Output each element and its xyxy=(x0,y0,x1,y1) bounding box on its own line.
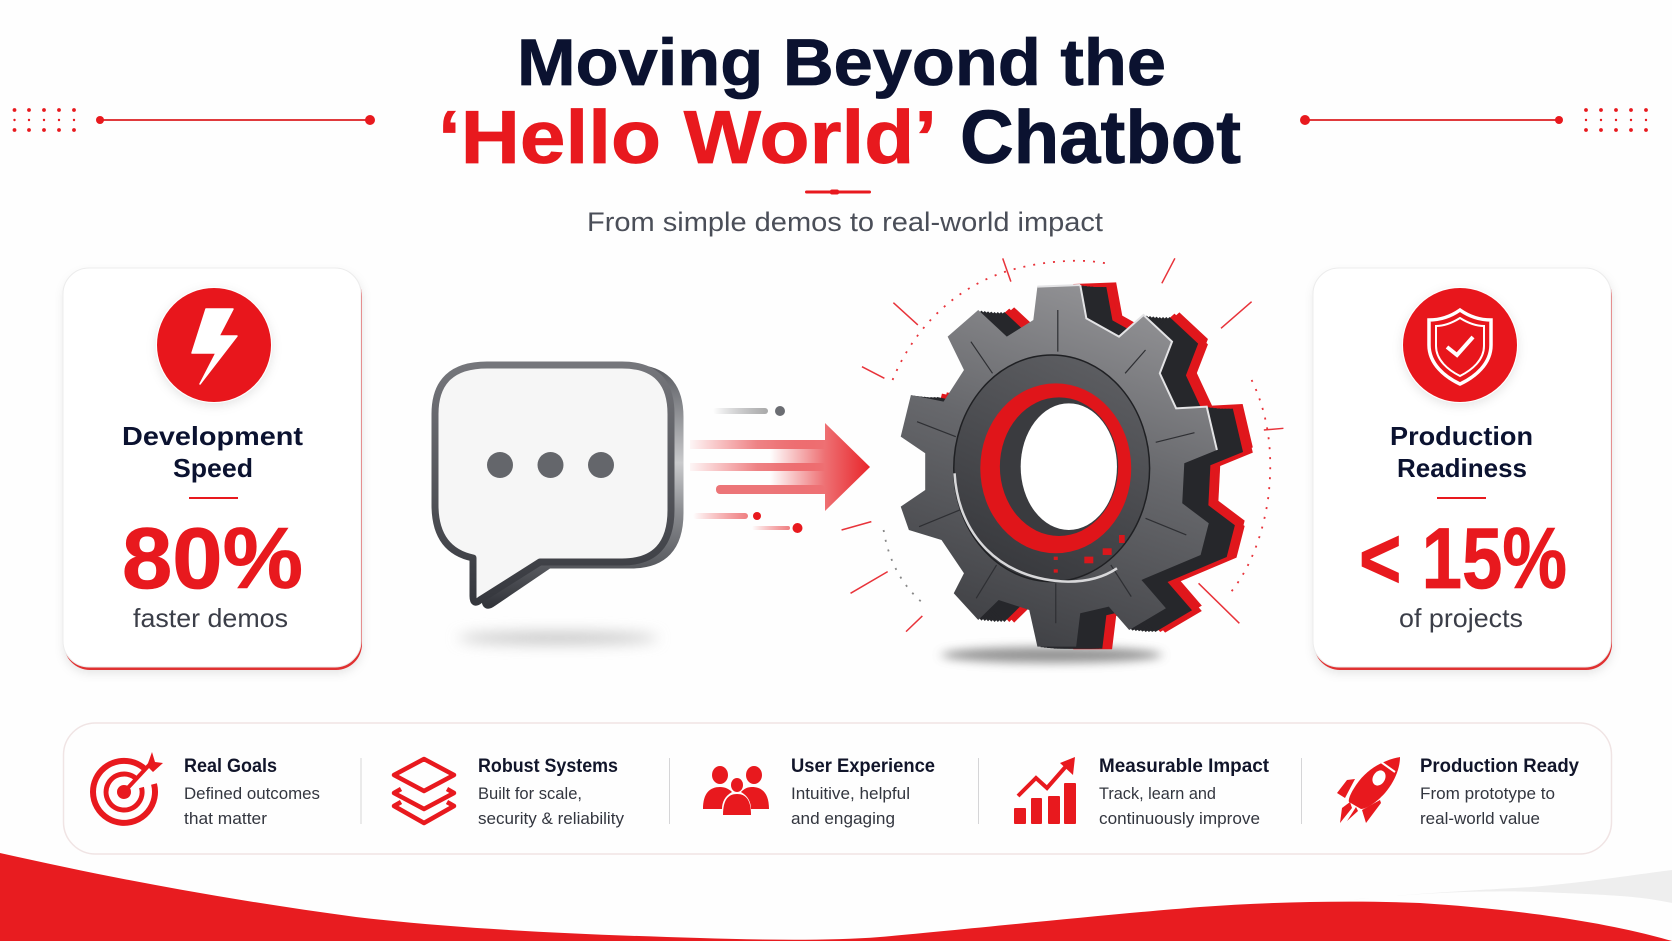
dividers xyxy=(360,758,1302,824)
gear spokes xyxy=(917,310,1194,623)
radial ticks and dotted arcs xyxy=(842,258,1283,632)
item: production ready: From prototype to xyxy=(1420,785,1555,803)
item: real goals: that matter xyxy=(184,810,268,828)
title xyxy=(438,25,1241,179)
typing dots xyxy=(487,452,614,478)
stat: less than 15%: < 15% xyxy=(1359,511,1567,607)
gear highlights xyxy=(1037,285,1217,450)
card heading: Speed xyxy=(173,453,253,483)
item: robust systems xyxy=(394,756,625,828)
item: user experience: User Experience xyxy=(791,756,935,777)
stat caption: faster demos xyxy=(133,603,288,633)
item: real goals: Defined outcomes xyxy=(184,785,320,803)
icon: rocket xyxy=(1337,757,1400,823)
item: measurable impact: continuously improve xyxy=(1099,810,1260,828)
title underline xyxy=(805,190,871,194)
card heading xyxy=(1390,421,1533,483)
item: real goals xyxy=(93,752,320,828)
item: user experience xyxy=(703,756,935,828)
bottom wave xyxy=(0,853,1672,941)
item: robust systems: Built for scale, xyxy=(478,785,582,803)
item: measurable impact xyxy=(1014,756,1270,828)
title: Chatbot xyxy=(960,95,1241,179)
stat caption: of projects xyxy=(1399,603,1523,633)
right decoration xyxy=(1300,108,1648,132)
card heading: Development xyxy=(122,421,303,451)
item: real goals: Real Goals xyxy=(184,756,277,777)
panel: benefits strip xyxy=(64,723,1612,854)
item: production ready: Production Ready xyxy=(1420,756,1579,777)
item: user experience: and engaging xyxy=(791,810,895,828)
icon: lightning bolt xyxy=(156,288,272,402)
icon: chat bubble xyxy=(435,365,680,644)
gear dark side xyxy=(904,286,1243,649)
icon: target xyxy=(93,752,163,823)
card heading: Readiness xyxy=(1397,453,1527,483)
item: measurable impact: Track, learn and xyxy=(1099,785,1216,803)
item: measurable impact: Measurable Impact xyxy=(1099,756,1270,777)
card heading: Production xyxy=(1390,421,1533,451)
icon: layers xyxy=(394,759,454,823)
left decoration xyxy=(13,108,375,132)
subtitle: From simple demos to real-world impact xyxy=(587,207,1104,237)
card heading xyxy=(122,421,303,483)
item: user experience: Intuitive, helpful xyxy=(791,785,910,803)
stat: 80%: 80% xyxy=(122,511,303,607)
item: robust systems: Robust Systems xyxy=(478,756,618,777)
icon: shield xyxy=(1402,288,1518,402)
title: Moving Beyond the xyxy=(517,25,1166,99)
gear red ring xyxy=(980,383,1131,553)
icon: gear xyxy=(842,258,1283,663)
icon: growth chart xyxy=(1014,757,1076,824)
gear hub ring xyxy=(954,355,1150,582)
gear shadow xyxy=(942,647,1162,663)
item: production ready xyxy=(1337,756,1579,828)
arrow: chatbot to gear xyxy=(690,406,870,533)
item: robust systems: security & reliability xyxy=(478,810,625,828)
panel: production readiness xyxy=(1313,268,1612,670)
title: ‘Hello World’ xyxy=(438,95,937,179)
item: production ready: real-world value xyxy=(1420,810,1540,828)
gear red rim xyxy=(932,282,1253,649)
gear hole xyxy=(1021,403,1117,530)
icon: people xyxy=(703,766,769,815)
panel: development speed xyxy=(63,268,362,670)
gear ring markings xyxy=(1054,535,1125,573)
